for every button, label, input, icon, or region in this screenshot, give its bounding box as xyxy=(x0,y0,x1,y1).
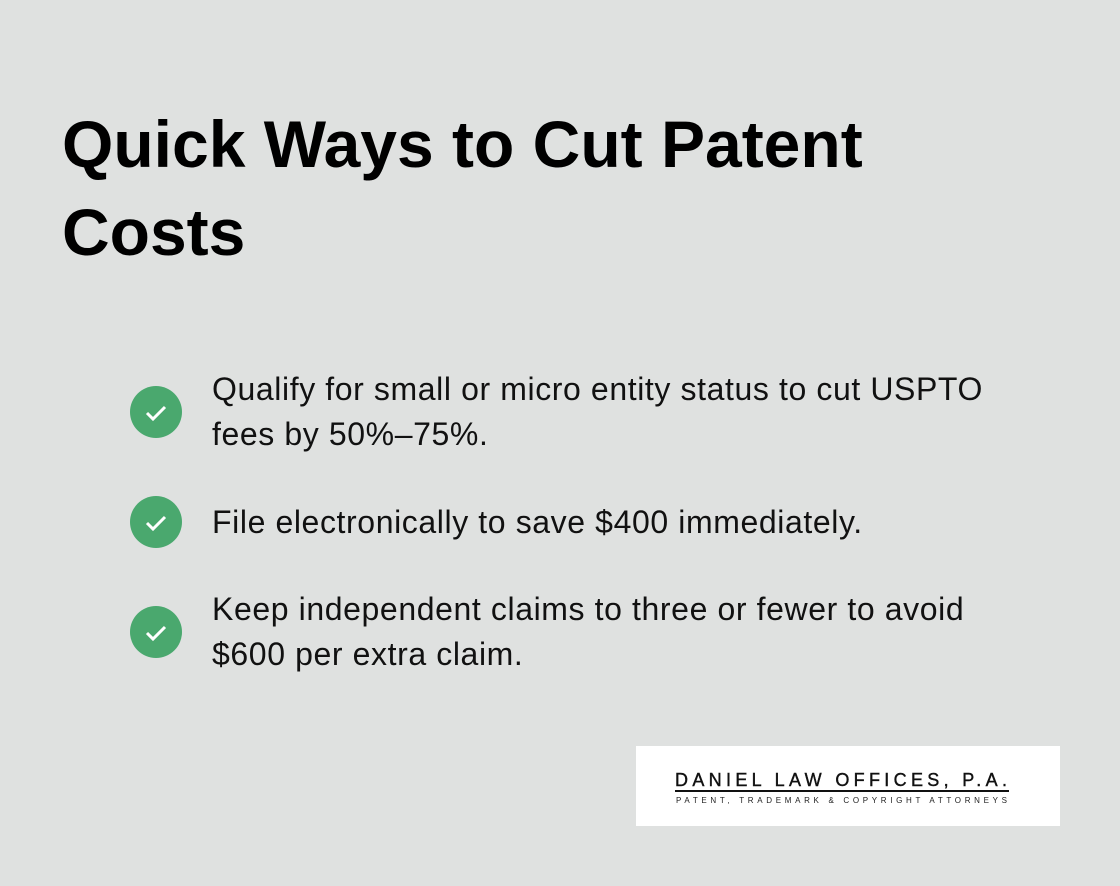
item 1 xyxy=(130,371,983,452)
text 2: File electronically to save $400 immediately. xyxy=(212,504,863,540)
text 1 xyxy=(212,371,983,452)
text 3: $600 per extra claim. xyxy=(212,636,523,672)
text 1: Qualify for small or micro entity status to cut USPTO xyxy=(212,371,983,407)
title xyxy=(62,107,863,269)
item 2 xyxy=(130,496,863,548)
text 3 xyxy=(212,591,964,672)
text 3: Keep independent claims to three or fewer to avoid xyxy=(212,591,964,627)
logo: PATENT, TRADEMARK & COPYRIGHT ATTORNEYS xyxy=(676,796,1007,805)
title: Costs xyxy=(62,195,245,269)
item 3 xyxy=(130,591,964,672)
logo xyxy=(636,746,1060,826)
icon: check 1 xyxy=(130,386,182,438)
logo: DANIEL LAW OFFICES, P.A. xyxy=(675,770,1007,790)
title: Quick Ways to Cut Patent xyxy=(62,107,863,181)
icon: check 3 xyxy=(130,606,182,658)
icon: check 2 xyxy=(130,496,182,548)
text 1: fees by 50%–75%. xyxy=(212,416,488,452)
